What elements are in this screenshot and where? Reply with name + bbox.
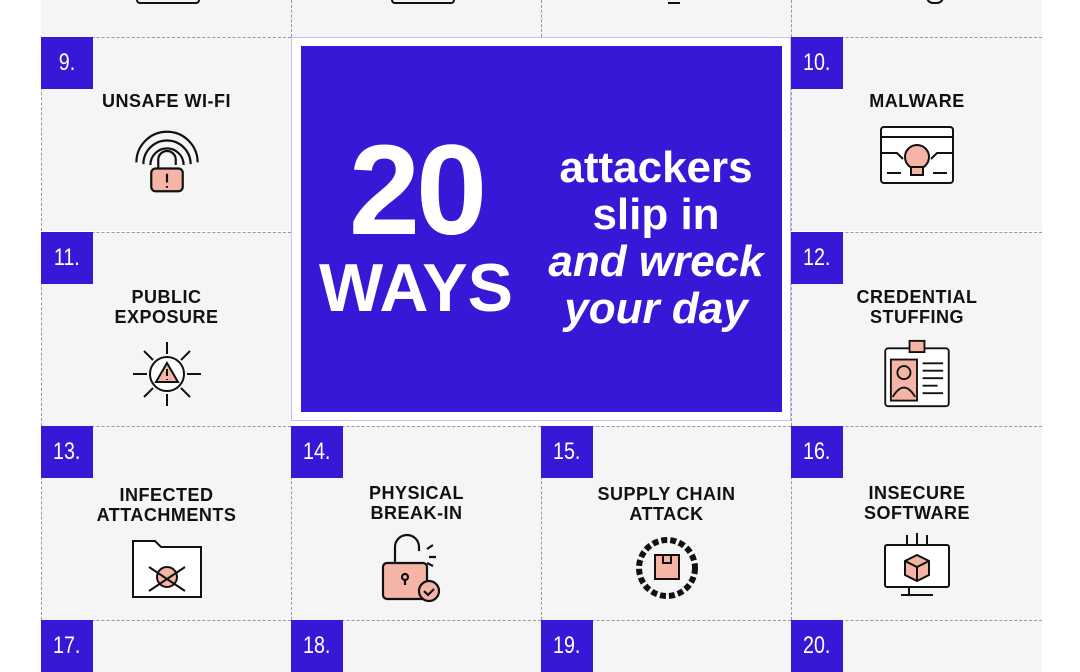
top partial row: [41, 0, 1042, 37]
icon: chain box: [636, 537, 698, 599]
subtitle: slip in: [592, 190, 720, 239]
title: 20 WAYS: [319, 119, 513, 326]
cell 16: 16.: [803, 438, 831, 465]
icon: exposure warning: [133, 342, 201, 406]
cell 15: ATTACK: [629, 504, 704, 524]
cell 10: 10.: [803, 49, 831, 76]
icon: malware screen: [880, 126, 954, 184]
cell 16: SOFTWARE: [864, 503, 970, 523]
cell 9: 9.: [59, 49, 75, 76]
subtitle: attackers: [559, 143, 753, 192]
cell 11: PUBLIC: [132, 287, 202, 307]
bottom partial row: 20.: [803, 632, 831, 659]
icon: wifi lock: [135, 130, 199, 192]
cell 16: INSECURE: [868, 483, 966, 503]
cell 14: [291, 426, 541, 620]
cell 10: [791, 37, 1042, 231]
cell 14: 14.: [303, 438, 331, 465]
icon: id badge: [884, 340, 950, 408]
cell 13: [41, 426, 291, 620]
cell 9: [41, 37, 291, 231]
title: 20 WAYS: WAYS: [319, 250, 513, 326]
bottom partial row: [41, 620, 1042, 672]
cell 15: [541, 426, 791, 620]
center title panel: [291, 37, 791, 421]
bottom partial row: 19.: [553, 632, 581, 659]
icon: folder skull: [132, 540, 202, 598]
cell 13: 13.: [53, 438, 81, 465]
cell 12: STUFFING: [870, 307, 964, 327]
cell 11: [41, 232, 291, 426]
title: 20 WAYS: 20: [349, 119, 483, 262]
bottom partial row: 18.: [303, 632, 331, 659]
icon: open padlock: [382, 534, 440, 602]
icon: monitor cube: [884, 533, 950, 596]
cell 12: CREDENTIAL: [856, 287, 978, 307]
cell 16: [791, 426, 1042, 620]
cell 12: [791, 232, 1042, 426]
cell 14: BREAK-IN: [370, 503, 462, 523]
cell 15: SUPPLY CHAIN: [597, 484, 736, 504]
cell 12: 12.: [803, 244, 831, 271]
cell 15: 15.: [553, 438, 581, 465]
cell 14: PHYSICAL: [369, 483, 464, 503]
cell 9: UNSAFE WI-FI: [102, 91, 231, 111]
subtitle: [548, 143, 766, 333]
cell 13: ATTACHMENTS: [97, 505, 236, 525]
cell 11: EXPOSURE: [114, 307, 219, 327]
subtitle: your day: [564, 284, 748, 333]
cell 10: MALWARE: [869, 91, 965, 111]
cell 13: INFECTED: [120, 485, 214, 505]
bottom partial row: 17.: [53, 632, 81, 659]
cell 11: 11.: [54, 244, 80, 271]
subtitle: and wreck: [548, 237, 764, 286]
